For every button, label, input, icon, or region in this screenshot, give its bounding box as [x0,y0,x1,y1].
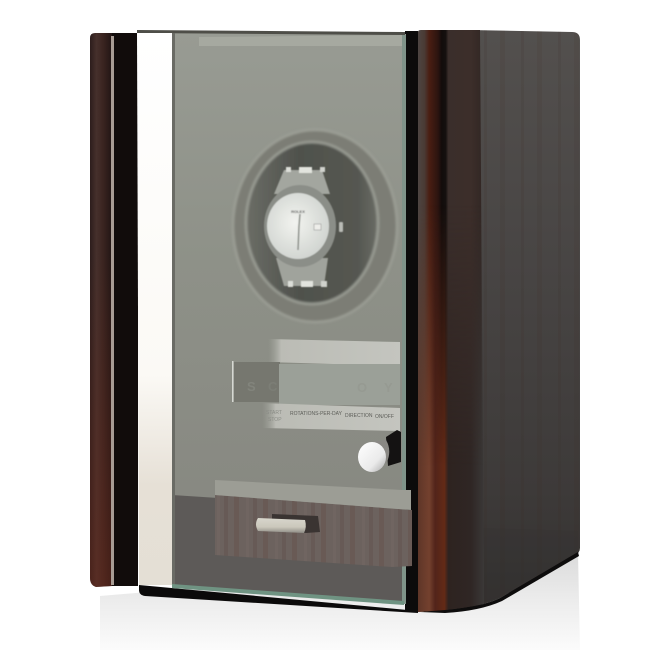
handle shadow [272,514,320,533]
glass door [137,30,406,605]
display glyphs [247,379,393,395]
drawer wood [215,495,412,567]
left wood column [90,33,112,587]
bottom steel bar [262,403,400,431]
lower bevel shading [483,528,578,602]
right wood column [418,30,484,612]
chrome strip [137,33,172,585]
green glass edge [402,35,406,604]
top inner band [199,35,402,46]
glass top edge [137,30,405,35]
floor reflection [100,553,580,650]
bracelet bottom [276,258,328,286]
display [279,364,400,405]
black column [112,33,138,586]
knob mount [386,430,401,466]
button labels [266,410,394,423]
lower dark reflection [172,495,406,604]
outer ring [233,130,397,322]
button labels: START [266,410,282,416]
green bottom edge [172,584,404,605]
left glass edge [172,33,175,585]
button labels: ROTATIONS-PER-DAY [290,411,343,417]
button labels: DIRECTION [345,413,373,419]
watch [264,167,343,287]
date window [314,224,321,230]
column highlight [111,36,114,585]
control panel [232,339,400,431]
drawer light band [215,480,411,510]
drawer [215,480,412,567]
knob face [358,442,386,472]
dark display block [234,362,280,402]
black door edge [405,31,418,612]
bracelet top [274,170,330,194]
display glyphs: S [247,379,256,394]
glass pane [172,32,406,604]
button labels: STOP [268,417,282,423]
inner cup [246,142,378,304]
display glyphs: C [268,379,278,394]
hands [298,214,300,250]
drawer handle [256,518,306,533]
bezel [264,185,336,267]
left light mark [232,361,234,402]
crown [339,222,343,232]
logo: ROLEX [291,209,305,214]
bottom edge [420,552,579,613]
dial [267,193,329,259]
button labels: ON/OFF [375,414,394,420]
winder well [233,130,397,322]
side panel [420,30,580,613]
display glyphs: O [357,380,367,395]
product photo: watch winder cabinet [90,30,580,636]
display glyphs: Y [384,380,393,395]
base plinth [139,585,418,613]
top steel bar [268,339,400,366]
door knob [358,430,401,472]
knob stem [372,440,389,471]
